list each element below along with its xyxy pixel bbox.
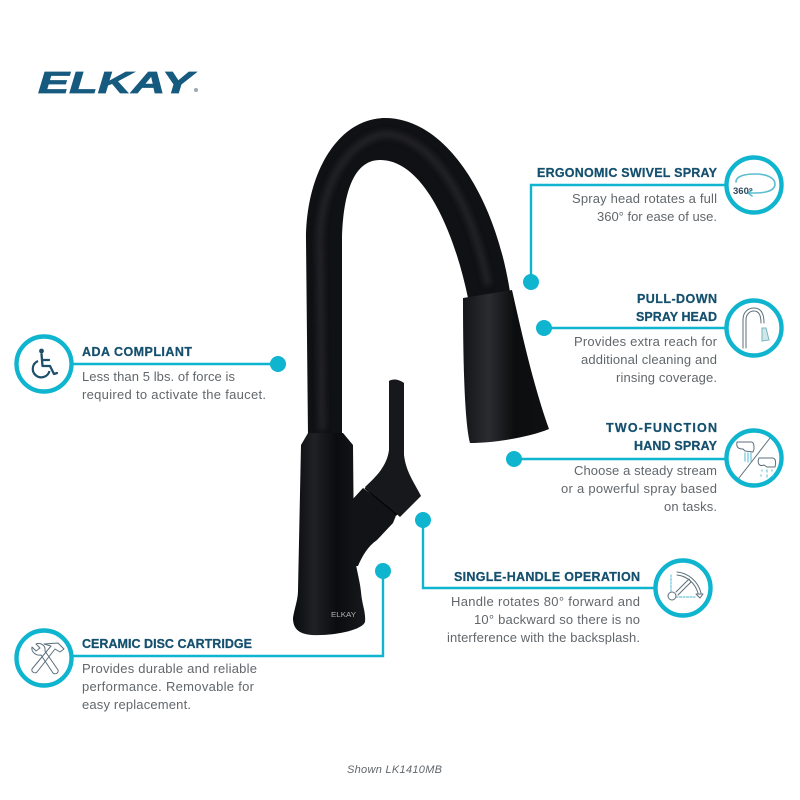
- description: Provides durable and reliable: [82, 661, 257, 676]
- icon: wheelchair: [16, 336, 72, 392]
- icon: handle rotation: [656, 560, 710, 616]
- callout: ceramic disc cartridge: [16, 563, 391, 712]
- description: rinsing coverage.: [616, 370, 717, 385]
- icon: 360 swivel: [726, 158, 782, 212]
- description: [572, 191, 717, 224]
- connector dot: [415, 512, 431, 528]
- callout: ADA compliant: [16, 336, 286, 402]
- heading: CERAMIC DISC CARTRIDGE: [82, 637, 252, 651]
- callout: two-function hand spray: [506, 421, 782, 514]
- gooseneck spout: [306, 118, 510, 436]
- faucet logo mark: ELKAY: [331, 612, 356, 619]
- description: on tasks.: [664, 499, 717, 514]
- connector dot: [506, 451, 522, 467]
- description: easy replacement.: [82, 697, 191, 712]
- description: [574, 334, 718, 385]
- connector line: [531, 185, 728, 282]
- description: Less than 5 lbs. of force is: [82, 369, 236, 384]
- connector dot: [375, 563, 391, 579]
- icon: wrench and hammer: [16, 630, 72, 686]
- description: Spray head rotates a full: [572, 191, 717, 206]
- description: or a powerful spray based: [561, 481, 717, 496]
- icon: faucet: [726, 300, 782, 356]
- description: interference with the backsplash.: [447, 630, 640, 645]
- description: [561, 463, 717, 514]
- icon: 360 swivel: 360°: [733, 186, 753, 197]
- heading: ADA COMPLIANT: [82, 345, 192, 359]
- description: Handle rotates 80° forward and: [451, 594, 640, 609]
- logo: Elkay: ELKAY: [38, 65, 198, 100]
- connector dot: [270, 356, 286, 372]
- heading: ERGONOMIC SWIVEL SPRAY: [537, 166, 718, 180]
- callout: pull-down spray head: [536, 292, 782, 385]
- heading: TWO-FUNCTION: [606, 421, 717, 435]
- heading: SINGLE-HANDLE OPERATION: [454, 570, 640, 584]
- heading: SPRAY HEAD: [636, 310, 717, 324]
- connector line: [544, 327, 728, 329]
- logo: Elkay: [38, 65, 198, 100]
- description: [447, 594, 640, 645]
- connector line: [423, 520, 658, 588]
- spray head: [463, 290, 549, 443]
- faucet body: [293, 433, 365, 635]
- heading: HAND SPRAY: [634, 439, 718, 453]
- description: required to activate the faucet.: [82, 387, 266, 402]
- description: Choose a steady stream: [574, 463, 717, 478]
- connector dot: [536, 320, 552, 336]
- description: additional cleaning and: [581, 352, 717, 367]
- faucet illustration: [293, 118, 549, 635]
- heading: [606, 421, 718, 453]
- description: 360° for ease of use.: [597, 209, 717, 224]
- icon: spray modes: [726, 430, 782, 486]
- description: Provides extra reach for: [574, 334, 718, 349]
- connector line: [68, 571, 383, 656]
- heading: [636, 292, 717, 324]
- description: [82, 661, 257, 712]
- heading: PULL-DOWN: [637, 292, 717, 306]
- connector dot: [523, 274, 539, 290]
- description: [82, 369, 266, 402]
- description: 10° backward so there is no: [474, 612, 640, 627]
- handle base: [352, 488, 397, 566]
- callout: ergonomic swivel spray: [523, 158, 782, 290]
- caption: Shown LK1410MB: [347, 764, 442, 776]
- handle lever: [365, 380, 421, 517]
- connector line: [514, 458, 728, 460]
- callout: single-handle operation: [415, 512, 710, 645]
- connector line: [70, 363, 278, 365]
- description: performance. Removable for: [82, 679, 255, 694]
